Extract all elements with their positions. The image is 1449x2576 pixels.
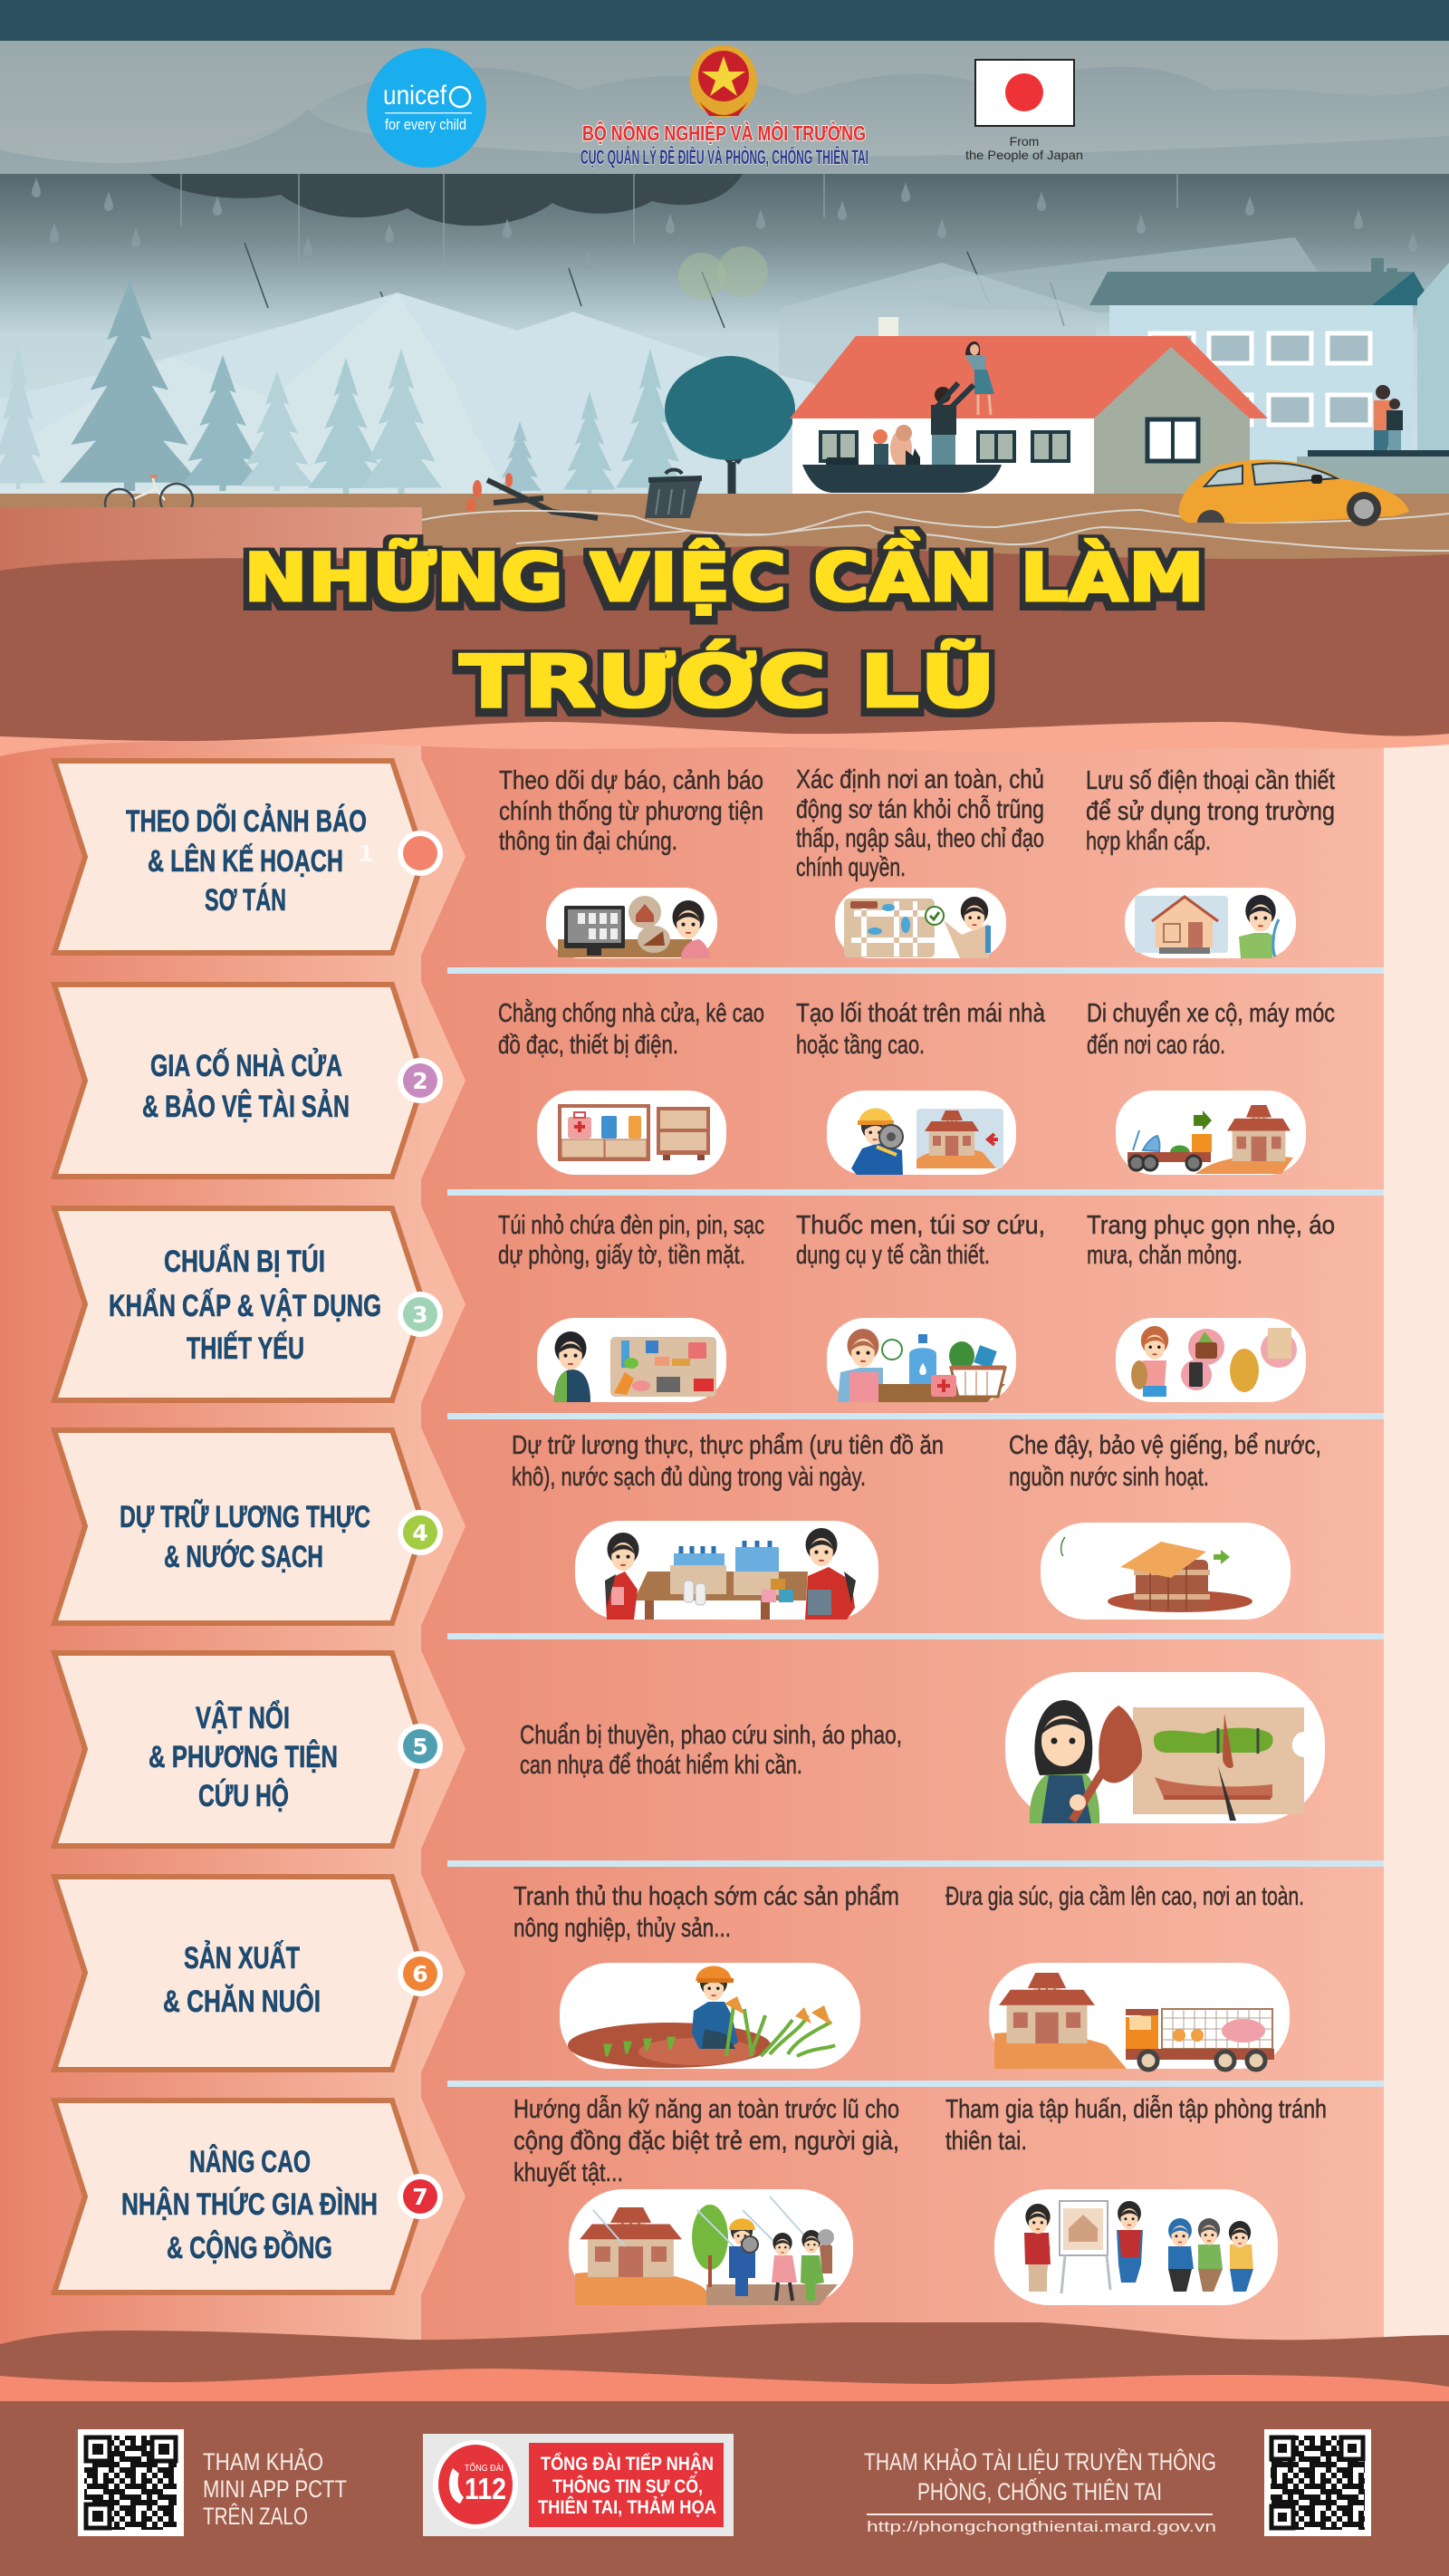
number badges: 2 <box>412 1068 428 1094</box>
yellow car <box>1178 460 1409 526</box>
row 1 text: động sơ tán khỏi chỗ trũng <box>796 794 1044 824</box>
row 6 text: Tranh thủ thu hoạch sớm các sản phẩm <box>513 1882 899 1911</box>
logo: Japan flag: the People of Japan <box>965 148 1083 162</box>
number badges: 4 <box>412 1520 428 1546</box>
hotline 112 badge <box>423 2434 734 2536</box>
header scene: flood illustration <box>0 0 1449 580</box>
illustration: emergency bag <box>537 1318 726 1402</box>
heading 2: GIA CỐ NHÀ CỬA <box>150 1048 342 1083</box>
heading 3: CHUẨN BỊ TÚI <box>164 1245 325 1279</box>
footer text left: MINI APP PCTT <box>203 2475 347 2503</box>
footer bar <box>0 2401 1449 2576</box>
boat <box>802 465 1002 493</box>
row 7 text: thiên tai. <box>945 2127 1027 2156</box>
title <box>244 530 1204 724</box>
logo: unicef: for every child <box>385 116 466 133</box>
row 1 text: Xác định nơi an toàn, chủ <box>796 765 1044 794</box>
illustration: roof escape <box>827 1091 1016 1175</box>
illustration: rice harvest <box>560 1963 860 2069</box>
number badges: 7 <box>412 2184 428 2210</box>
illustration: clothes and documents <box>1116 1318 1306 1402</box>
logo: unicef <box>367 48 486 168</box>
heading 5: & PHƯƠNG TIỆN <box>149 1740 338 1774</box>
row 3 text: dụng cụ y tế cần thiết. <box>796 1241 990 1270</box>
illustration: disaster drill training <box>994 2189 1278 2305</box>
row 3 text: Trang phục gọn nhẹ, áo <box>1087 1211 1335 1240</box>
heading 4: DỰ TRỮ LƯƠNG THỰC <box>120 1500 370 1534</box>
illustration: community safety guidance <box>569 2189 853 2305</box>
trash can <box>645 469 702 518</box>
main content background: left column <box>0 735 422 2357</box>
row 2 text: đến nơi cao ráo. <box>1087 1031 1225 1060</box>
dark top band <box>0 0 1449 41</box>
number badges: 6 <box>412 1961 428 1987</box>
logo: national emblem and ministry: CỤC QUẢN LÝ ĐÊ ĐIỀU VÀ PHÒNG, CHỐNG THIÊN TAI <box>581 145 868 168</box>
row 3 text <box>498 1211 1335 1270</box>
footer text left: THAM KHẢO <box>203 2446 323 2475</box>
footer text left: TRÊN ZALO <box>203 2502 308 2530</box>
heading 5: CỨU HỘ <box>198 1778 289 1813</box>
heading 3 <box>54 1208 424 1400</box>
row 3 text: dự phòng, giấy tờ, tiền mặt. <box>498 1241 745 1270</box>
salmon left block <box>0 507 422 580</box>
heading 7: NHẬN THỨC GIA ĐÌNH <box>121 2187 378 2222</box>
row 3 text: Túi nhỏ chứa đèn pin, pin, sạc <box>498 1211 764 1240</box>
bottom brown wave <box>0 2322 1449 2391</box>
row 5 text: can nhựa để thoát hiểm khi cần. <box>520 1751 802 1780</box>
logo: national emblem and ministry <box>581 45 868 168</box>
heading 5 <box>54 1653 424 1846</box>
suitcase <box>826 457 859 468</box>
illustration: furniture shelf <box>537 1091 726 1175</box>
rain drops <box>32 178 1417 270</box>
illustration: truck to high ground <box>1116 1091 1306 1175</box>
pine trees <box>0 281 685 494</box>
hotline 112 badge: THIÊN TAI, THẢM HỌA <box>538 2496 716 2518</box>
logo: unicef: unicef <box>383 81 447 111</box>
row 2 text: đồ đạc, thiết bị điện. <box>498 1031 678 1060</box>
row 4 text: nguồn nước sinh hoạt. <box>1009 1463 1209 1492</box>
row 7 text: khuyết tật... <box>513 2158 623 2187</box>
row 3 text: Thuốc men, túi sơ cứu, <box>796 1211 1045 1240</box>
row 5 text: Chuẩn bị thuyền, phao cứu sinh, áo phao, <box>520 1721 902 1750</box>
illustration: livestock truck <box>989 1963 1290 2070</box>
bicycle <box>105 476 193 518</box>
row 4 text: Dự trữ lương thực, thực phẩm (ưu tiên đồ ăn <box>512 1431 944 1460</box>
heading 3: KHẨN CẤP & VẬT DỤNG <box>109 1289 381 1323</box>
title: TRƯỚC LŨ <box>459 640 996 724</box>
dark storm cloud <box>149 174 743 226</box>
logo: Japan flag <box>965 60 1083 162</box>
family on platform <box>1374 385 1403 450</box>
QR code right <box>1264 2429 1371 2536</box>
number badges: 1 <box>358 841 374 867</box>
illustration: phone call <box>1125 888 1296 958</box>
row 2 text: Chằng chống nhà cửa, kê cao <box>498 998 764 1028</box>
illustration: covered water barrel <box>1041 1523 1291 1620</box>
row 1 text: Lưu số điện thoại cần thiết <box>1086 766 1335 795</box>
row 4 text: khô), nước sạch đủ dùng trong vài ngày. <box>512 1463 866 1492</box>
row 1 text: để sử dụng trong trường <box>1086 797 1335 826</box>
row 5 text <box>520 1721 902 1780</box>
row 1 text: thông tin đại chúng. <box>499 827 677 856</box>
heading 2: & BẢO VỆ TÀI SẢN <box>142 1090 350 1124</box>
footer text right: http://phongchongthientai.mard.gov.vn <box>867 2518 1216 2535</box>
man in boat <box>935 387 951 403</box>
logo: national emblem and ministry: BỘ NÔNG NGHIỆP VÀ MÔI TRƯỜNG <box>582 120 866 145</box>
row 1 text: thấp, ngập sâu, theo chỉ đạo <box>796 824 1044 853</box>
hotline 112 badge: TỔNG ĐÀI <box>465 2462 504 2474</box>
hotline 112 badge: TỔNG ĐÀI TIẾP NHẬN <box>541 2453 714 2475</box>
row 3 text: mưa, chăn mỏng. <box>1087 1241 1243 1270</box>
rain streaks <box>245 243 1064 393</box>
bottom salmon wave <box>0 2369 1449 2402</box>
row 4 text: Che đậy, bảo vệ giếng, bể nước, <box>1009 1431 1321 1460</box>
arrow tabs behind headings <box>421 758 465 2295</box>
hotline 112 badge: THÔNG TIN SỰ CỐ, <box>552 2475 703 2497</box>
heading 7: & CỘNG ĐỒNG <box>167 2230 332 2265</box>
row 6 text <box>513 1882 1304 1943</box>
windows <box>820 432 1069 461</box>
right edge strip <box>1384 735 1449 2357</box>
heading 4 <box>54 1430 424 1623</box>
heading 1: SƠ TÁN <box>205 883 286 918</box>
number badges: 5 <box>412 1734 428 1760</box>
heading 7 <box>54 2100 424 2292</box>
mountains <box>0 293 906 494</box>
footer text right: PHÒNG, CHỐNG THIÊN TAI <box>917 2476 1162 2505</box>
row 6 text: nông nghiệp, thủy sản... <box>513 1914 731 1943</box>
background building <box>1089 258 1449 494</box>
row 1 text: chính quyền. <box>796 853 906 882</box>
number badges: 3 <box>412 1302 428 1328</box>
illustration: evacuation map <box>835 888 1006 958</box>
heading 1: & LÊN KẾ HOẠCH <box>148 844 343 879</box>
pale wave below title <box>0 706 1449 756</box>
row 7 text <box>513 2094 1327 2187</box>
row 7 text: Hướng dẫn kỹ năng an toàn trước lũ cho <box>513 2094 899 2124</box>
distant roofs <box>892 237 1331 312</box>
teal tree <box>665 356 795 494</box>
heading 4: & NƯỚC SẠCH <box>164 1540 323 1574</box>
row 4 text <box>512 1431 1321 1492</box>
number badges <box>358 831 443 2219</box>
heading 6 <box>54 1877 424 2070</box>
ground <box>0 494 1449 575</box>
footer text left <box>203 2446 347 2530</box>
footer text right: THAM KHẢO TÀI LIỆU TRUYỀN THÔNG <box>864 2446 1216 2475</box>
row 1 text: Theo dõi dự báo, cảnh báo <box>499 766 763 795</box>
row 2 text <box>498 998 1335 1060</box>
illustration: medical supplies <box>827 1318 1016 1402</box>
row 6 text: Đưa gia súc, gia cầm lên cao, nơi an toàn. <box>945 1882 1304 1911</box>
woman on roof <box>965 341 980 355</box>
row 2 text: hoặc tầng cao. <box>796 1031 925 1060</box>
heading 1: THEO DÕI CẢNH BÁO <box>126 804 367 839</box>
row 1 text: hợp khẩn cấp. <box>1086 827 1211 856</box>
row 7 text: cộng đồng đặc biệt trẻ em, người già, <box>513 2127 899 2156</box>
illustration: rescue boat and paddle <box>1005 1672 1325 1823</box>
footer text right <box>864 2446 1216 2535</box>
heading 6: & CHĂN NUÔI <box>163 1984 321 2019</box>
illustration: food and water supplies <box>575 1521 878 1620</box>
row 1 text <box>499 765 1335 882</box>
row 2 text: Di chuyển xe cộ, máy móc <box>1087 999 1335 1028</box>
heading 7: NÂNG CAO <box>189 2145 311 2179</box>
illustration: watching forecast <box>546 888 717 958</box>
rescue house <box>790 317 1268 494</box>
title: NHỮNG VIỆC CẦN LÀM <box>244 530 1204 617</box>
dividers <box>447 967 1384 2087</box>
branch <box>466 473 598 518</box>
row 7 text: Tham gia tập huấn, diễn tập phòng tránh <box>945 2094 1327 2124</box>
row 1 text: chính thống từ phương tiện <box>499 797 763 826</box>
main content background: right column <box>421 735 1384 2357</box>
heading 3: THIẾT YẾU <box>187 1331 304 1366</box>
child dog cat <box>873 429 888 444</box>
heading 2 <box>54 985 424 1177</box>
heading 5: VẬT NỔI <box>196 1701 290 1735</box>
hotline 112 badge: 112 <box>465 2472 506 2505</box>
heading 1 <box>54 761 424 953</box>
heading 6: SẢN XUẤT <box>184 1941 300 1975</box>
row 2 text: Tạo lối thoát trên mái nhà <box>796 999 1046 1028</box>
translucent logo band <box>0 41 1449 174</box>
QR code left <box>78 2429 184 2536</box>
logo: Japan flag: From <box>1010 134 1039 149</box>
flood water lines <box>422 510 1449 551</box>
brown title wave <box>0 546 1449 741</box>
